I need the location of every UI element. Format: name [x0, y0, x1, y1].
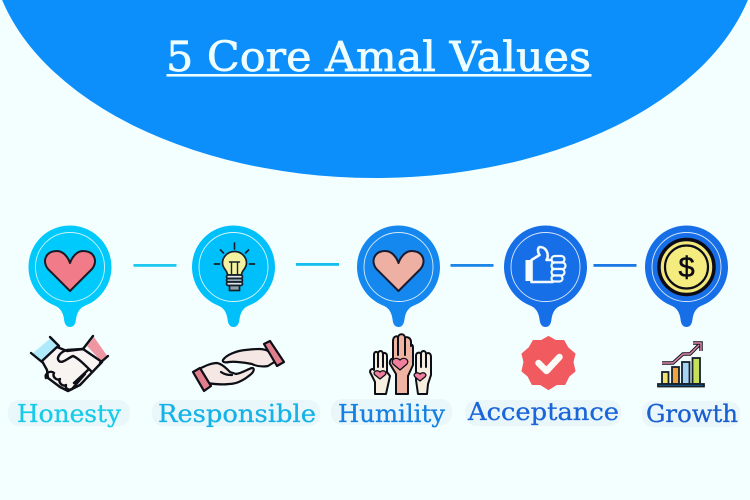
connector 3	[450, 264, 494, 267]
icon: verified badge	[522, 337, 574, 389]
pin: acceptance	[504, 226, 587, 327]
pin: growth	[645, 226, 728, 327]
icon: light bulb	[214, 243, 254, 290]
icon: peach heart	[374, 251, 424, 291]
connector 2	[296, 263, 339, 266]
connector 4	[594, 264, 636, 267]
icon: growth chart	[658, 343, 704, 386]
label: acceptance: Acceptance	[467, 398, 619, 426]
icon: dollar coin: $	[678, 252, 695, 284]
icon: thumbs up	[526, 247, 566, 282]
connector 1	[134, 264, 176, 267]
label: honesty: Honesty	[17, 400, 121, 428]
icon: handshake	[31, 336, 108, 391]
icon: giving hands	[193, 341, 284, 391]
pin: responsible	[192, 226, 275, 327]
pin: humility	[357, 226, 440, 327]
icon: raised hands	[370, 334, 431, 394]
icon: heart	[45, 251, 95, 291]
pin: honesty	[28, 226, 112, 327]
label: growth: Growth	[646, 400, 738, 428]
label: humility: Humility	[338, 400, 445, 428]
header shape	[0, 0, 750, 178]
title: 5 Core Amal Values	[166, 33, 591, 81]
label: responsible: Responsible	[158, 400, 316, 428]
